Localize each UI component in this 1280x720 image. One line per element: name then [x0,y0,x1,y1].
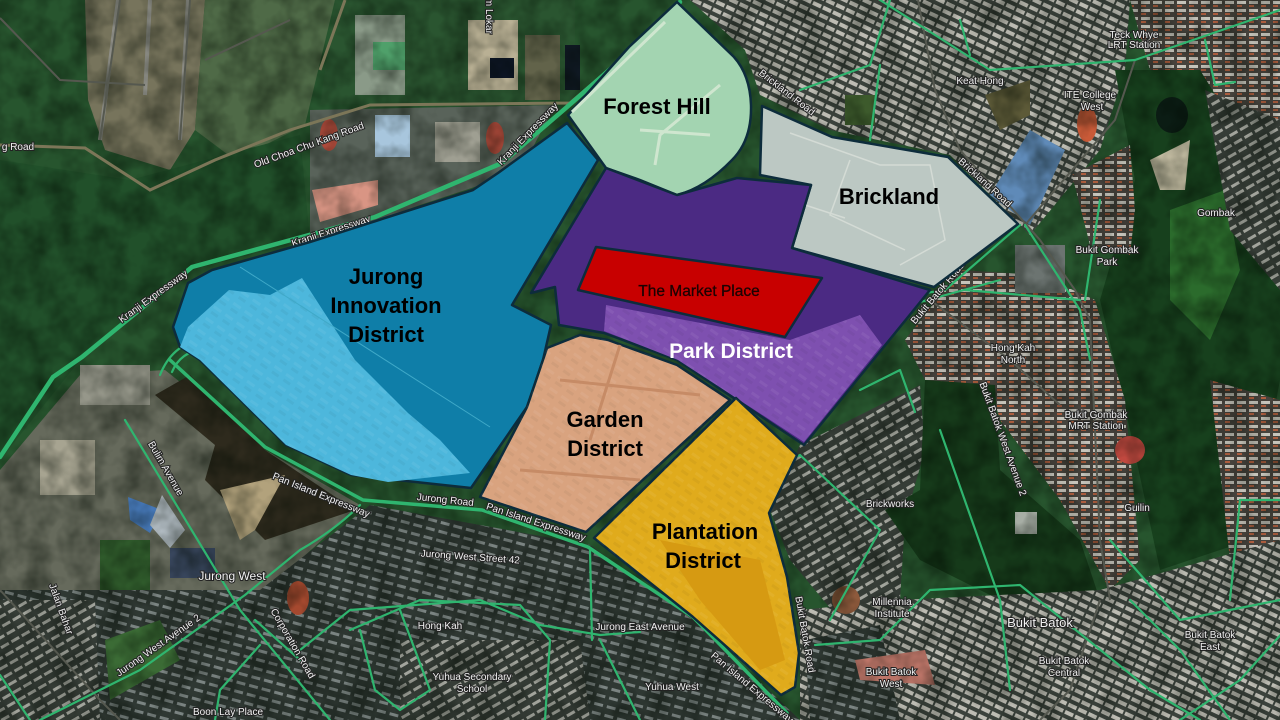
lighter housing area [604,305,882,442]
district: Forest Hill [568,2,751,195]
label: Garden [566,407,644,432]
map street labels: Pan Island Expressway [271,471,371,520]
map street labels: Old Choa Chu Kang Road [253,121,366,171]
district: Plantation District: District [665,548,742,573]
map street labels: Kranji Expressway [117,268,190,326]
top forest and ponds [320,0,580,105]
south-east urban [800,540,1280,720]
campus complex [310,105,555,245]
map street labels: Jurong West Street 42 [420,549,521,566]
gombak forest [1100,70,1280,570]
label: The Market Place [638,283,760,300]
district: Brickland [760,106,1018,287]
map street labels: Bukit Batok Road [909,260,967,327]
label: Plantation [652,519,758,544]
map street labels: Kranji Expressway [496,101,561,168]
map street labels: Bulim Avenue [145,440,185,498]
map street labels: LRT Station [1108,40,1160,51]
southern urban [0,505,800,720]
camp area [195,0,335,160]
airfield [85,0,205,170]
map street labels: Guilin [1124,503,1150,514]
label: Jurong [349,264,423,289]
map street labels: Corporation Road [268,607,317,681]
map street labels: East [1200,642,1220,653]
map street labels: West [880,679,903,690]
map street labels: Millennia [872,597,912,608]
map street labels: Jalan Bahar [46,582,75,637]
district: Jurong Innovation District: District [348,322,425,347]
map street labels: Hong Kah [991,343,1035,354]
map street labels: Brickland Road [756,68,817,118]
district: Park District [531,168,930,445]
map street labels: Pan Island Expressway [485,501,587,544]
feature: The Market Place [578,247,822,337]
west industrial [0,365,360,620]
map street labels: MRT Station [1068,421,1124,432]
label: Park District [669,340,793,363]
map street labels: North [1001,355,1025,366]
east urban [1210,380,1280,560]
map street labels: Hong Kah [418,621,462,632]
map street labels: Bukit Batok [1185,630,1236,641]
map street labels: Park [1097,257,1118,268]
map street labels: Bukit Gombak [1076,245,1139,256]
district: Jurong Innovation District: Innovation [330,293,442,318]
label: Forest Hill [603,94,711,119]
map street labels: Bukit Batok Road [792,596,817,674]
map street labels: Gombak [1197,208,1236,219]
label: Brickland [839,184,939,209]
map street labels: Brickworks [866,499,914,510]
district: Jurong Innovation District [173,123,598,488]
map street labels: ITE College [1064,90,1117,101]
brickworks urban [770,385,925,620]
lighter built-up area [180,278,470,482]
dark forest [0,135,310,460]
map street labels: Jurong West Avenue 2 [114,612,203,679]
district: Garden District: District [567,436,644,461]
map street labels: Yuhua Secondary [433,672,511,683]
map street labels: Keat Hong [956,76,1004,87]
map street labels: West [1081,102,1104,113]
map street labels: Boon Lay Place [193,707,263,718]
district: Garden District [480,335,730,532]
map street labels: Brickland Road [956,156,1014,210]
map street labels: Yuhua West [645,682,699,693]
map street labels: Kranji Expressway [290,214,372,250]
faint power line [240,267,490,427]
map street labels: Teck Whye [1110,30,1159,41]
central urban [1072,145,1135,255]
district: Plantation District [594,398,799,695]
map street labels: Bukit Batok [866,667,917,678]
map street labels: Jurong Road [416,492,474,509]
map street labels: Bukit Batok [1007,615,1073,630]
north-east urban [690,0,1130,235]
map street labels: Bukit Gombak [1065,410,1128,421]
map street labels: Central [1048,668,1080,679]
central forest [885,380,1100,600]
blue roof blocks [990,130,1065,225]
map street labels: Bukit Batok West Avenue 2 [977,381,1028,498]
map street labels: School [457,684,487,695]
map street labels: Institute [874,609,910,620]
map street labels: g Road [2,142,34,153]
map street labels: Jurong East Avenue [595,622,685,633]
map street labels: Bukit Batok [1039,656,1090,667]
map street labels: Jurong West [198,569,266,583]
